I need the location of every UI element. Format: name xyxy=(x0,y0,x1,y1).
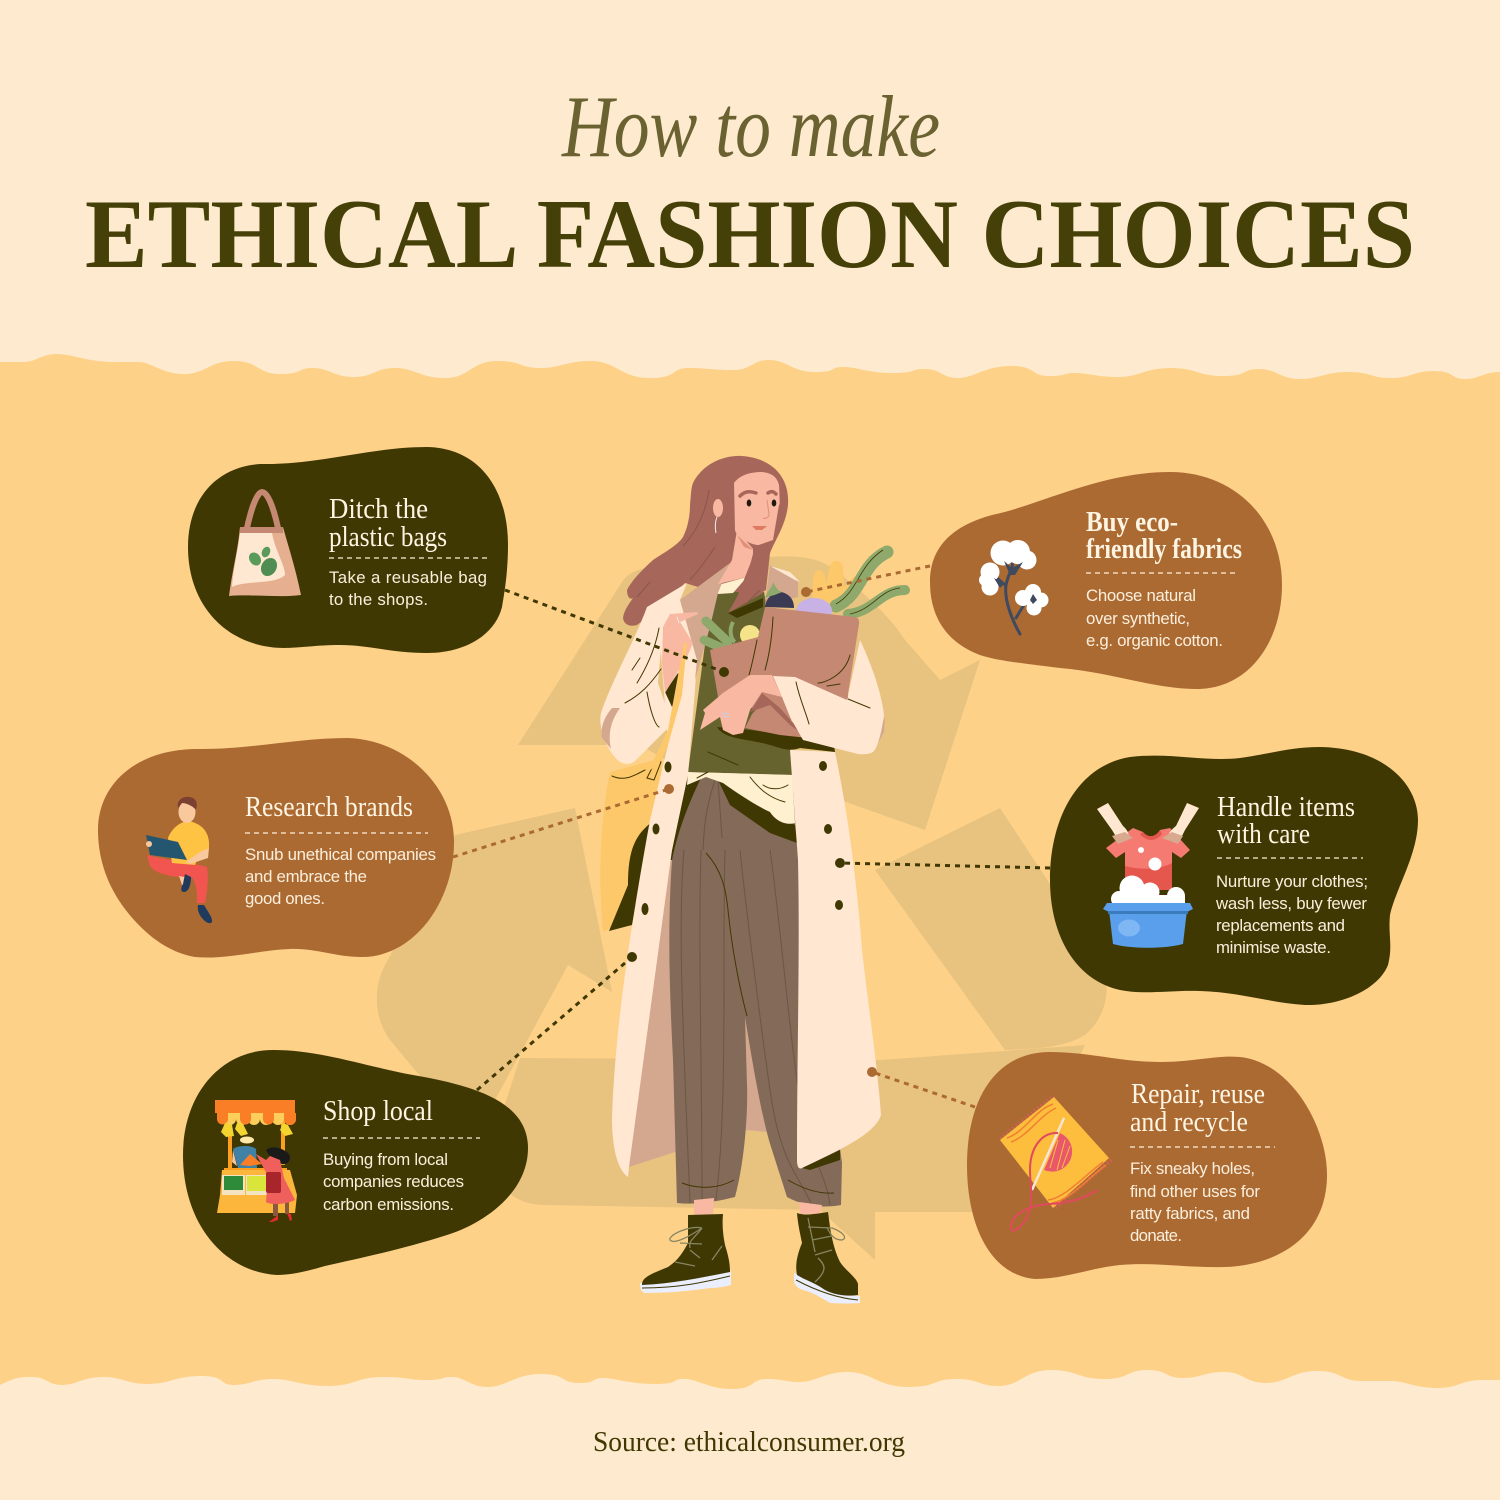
coat lining shadow at side xyxy=(609,822,652,931)
body text: good ones. xyxy=(245,889,325,908)
ear with earring xyxy=(713,499,723,533)
shirt hem folds xyxy=(697,752,788,802)
panel: handle items with care xyxy=(1050,747,1418,1005)
central figure: woman holding grocery bag xyxy=(600,456,905,1304)
body text: find other uses for xyxy=(1130,1182,1260,1201)
connector: research blob to coat button xyxy=(453,784,674,857)
body text: carbon emissions. xyxy=(323,1195,454,1214)
right sleeve xyxy=(773,640,885,754)
icon: cotton plant xyxy=(979,540,1048,634)
panel: research brands xyxy=(98,738,454,958)
body text: to the shops. xyxy=(329,590,428,609)
front hair strand and strands lines xyxy=(637,490,788,613)
raised hand xyxy=(662,612,698,707)
icon: market stall xyxy=(215,1100,297,1222)
yellow shoulder bag xyxy=(600,758,662,932)
source line: Source: ethicalconsumer.org xyxy=(593,1427,905,1458)
heading: Buy eco- xyxy=(1086,507,1178,538)
icon: tote bag xyxy=(229,492,301,596)
background recycle symbol xyxy=(377,556,1107,1260)
heading: Repair, reuse xyxy=(1131,1079,1265,1110)
right boot xyxy=(794,1212,860,1304)
coat buttons xyxy=(642,761,843,915)
heading line 2: friendly fabrics xyxy=(1086,534,1242,565)
body text: Choose natural xyxy=(1086,586,1196,605)
body text: Take a reusable bag xyxy=(329,568,487,587)
heading: Shop local xyxy=(323,1096,433,1127)
connector: care blob to coat xyxy=(835,858,1050,868)
coat left panel xyxy=(612,583,697,1177)
connector: shop local blob to coat xyxy=(477,952,637,1090)
heading line 2: with care xyxy=(1217,819,1310,850)
heading: Handle items xyxy=(1217,792,1355,823)
header band with torn edge xyxy=(0,0,1500,379)
panel: shop local xyxy=(183,1050,528,1275)
heading: Ditch the xyxy=(329,494,428,525)
holding arm and hand xyxy=(700,675,782,735)
panel: ditch the plastic bags xyxy=(188,447,508,653)
dark gap beside waist xyxy=(670,772,708,860)
heading line 2: and recycle xyxy=(1130,1107,1248,1138)
coat back, interior xyxy=(629,850,800,1167)
title script line: How to make xyxy=(561,79,940,176)
collar xyxy=(680,563,800,680)
body text: companies reduces xyxy=(323,1172,464,1191)
body text: over synthetic, xyxy=(1086,609,1190,628)
left boot xyxy=(640,1214,731,1293)
main title: ETHICAL FASHION CHOICES xyxy=(85,180,1415,289)
footer band with torn edge xyxy=(0,1370,1500,1500)
body text: minimise waste. xyxy=(1216,938,1331,957)
eyebrows, eyes, nose and lips xyxy=(740,492,776,496)
coat right panel xyxy=(790,750,881,1170)
shadow under arm xyxy=(717,727,835,752)
icon: person with laptop xyxy=(146,797,212,923)
heading line 2: plastic bags xyxy=(329,522,447,553)
body text: Snub unethical companies xyxy=(245,845,436,864)
paper bag xyxy=(710,607,859,720)
body text: e.g. organic cotton. xyxy=(1086,631,1223,650)
body text: ratty fabrics, and xyxy=(1130,1204,1250,1223)
ankles xyxy=(694,1198,822,1216)
connector: bag blob to grocery bag xyxy=(505,590,729,677)
body text: replacements and xyxy=(1216,916,1345,935)
connector: repair blob to coat xyxy=(867,1067,975,1107)
body text: wash less, buy fewer xyxy=(1215,894,1367,913)
left sleeve xyxy=(600,607,672,764)
yellow bag strap xyxy=(648,643,687,772)
panel: repair, reuse and recycle xyxy=(967,1052,1327,1279)
panel: buy eco-friendly fabrics xyxy=(930,472,1282,689)
body text: Nurture your clothes; xyxy=(1216,872,1368,891)
bag fold held by arm xyxy=(745,693,825,738)
trousers xyxy=(669,776,842,1206)
green top xyxy=(688,592,795,775)
face and neck xyxy=(718,472,780,584)
icon: patched fabric with needle and thread xyxy=(1000,1096,1111,1230)
body text: and embrace the xyxy=(245,867,367,886)
heading: Research brands xyxy=(245,792,413,823)
body text: Fix sneaky holes, xyxy=(1130,1159,1255,1178)
body text: Buying from local xyxy=(323,1150,448,1169)
cream shirt hem xyxy=(718,780,797,843)
dark neckline shadow xyxy=(728,598,763,618)
icon: washing a shirt in a basin xyxy=(1097,803,1199,948)
body text: donate. xyxy=(1130,1226,1182,1245)
connector: fabrics blob to coat xyxy=(801,566,930,597)
hair, back layer xyxy=(623,456,788,626)
produce in bag xyxy=(704,550,905,648)
